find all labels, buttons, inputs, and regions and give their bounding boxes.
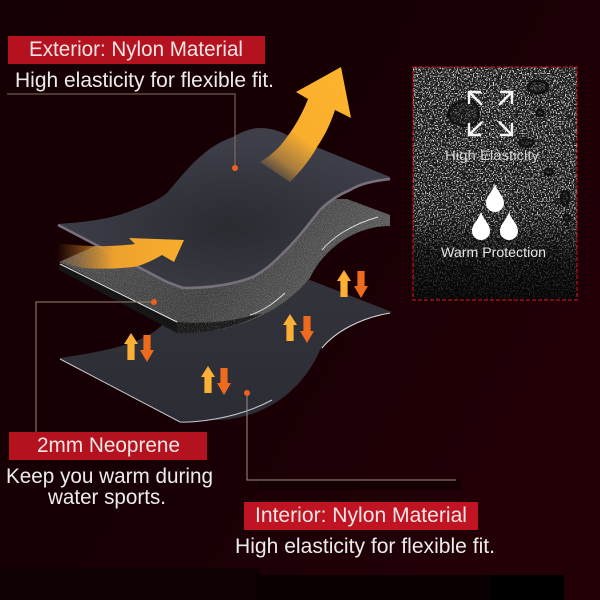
- text: neoprene description: water sports.: [47, 486, 166, 509]
- middle layer: neoprene: [59, 199, 390, 334]
- text: high elasticity: High Elasticity: [445, 147, 539, 163]
- text: interior description: High elasticity for flexible fit.: [235, 535, 495, 558]
- icon: water drops: [472, 184, 518, 240]
- arrow: incoming: [57, 238, 184, 269]
- text: warm protection: Warm Protection: [441, 244, 546, 260]
- water beads: [448, 81, 570, 274]
- top layer: exterior nylon: [58, 128, 390, 288]
- label: neoprene: 2mm Neoprene: [37, 434, 180, 457]
- icon: expand arrows: [469, 92, 512, 135]
- leader line: exterior: [7, 94, 238, 171]
- arrow: large outgoing: [260, 67, 351, 182]
- label: exterior nylon: Exterior: Nylon Material: [29, 38, 243, 61]
- text: exterior description: High elasticity for flexible fit.: [15, 69, 274, 92]
- bottom layer: interior nylon: [60, 280, 392, 422]
- label: neoprene: [9, 432, 207, 460]
- text: neoprene description: Keep you warm during: [6, 465, 213, 488]
- dashed border: [413, 67, 577, 300]
- layered material illustration: [40, 128, 400, 422]
- text: neoprene description: [6, 465, 213, 509]
- small heat arrows: [124, 270, 368, 395]
- panel: fabric features: [413, 67, 577, 300]
- leader line: interior: [244, 390, 456, 480]
- dark bottom band: [0, 481, 564, 600]
- label: exterior nylon: [8, 36, 265, 64]
- leader line: neoprene: [36, 299, 157, 432]
- label: interior nylon: Interior: Nylon Material: [255, 504, 467, 527]
- fabric texture: [413, 67, 577, 300]
